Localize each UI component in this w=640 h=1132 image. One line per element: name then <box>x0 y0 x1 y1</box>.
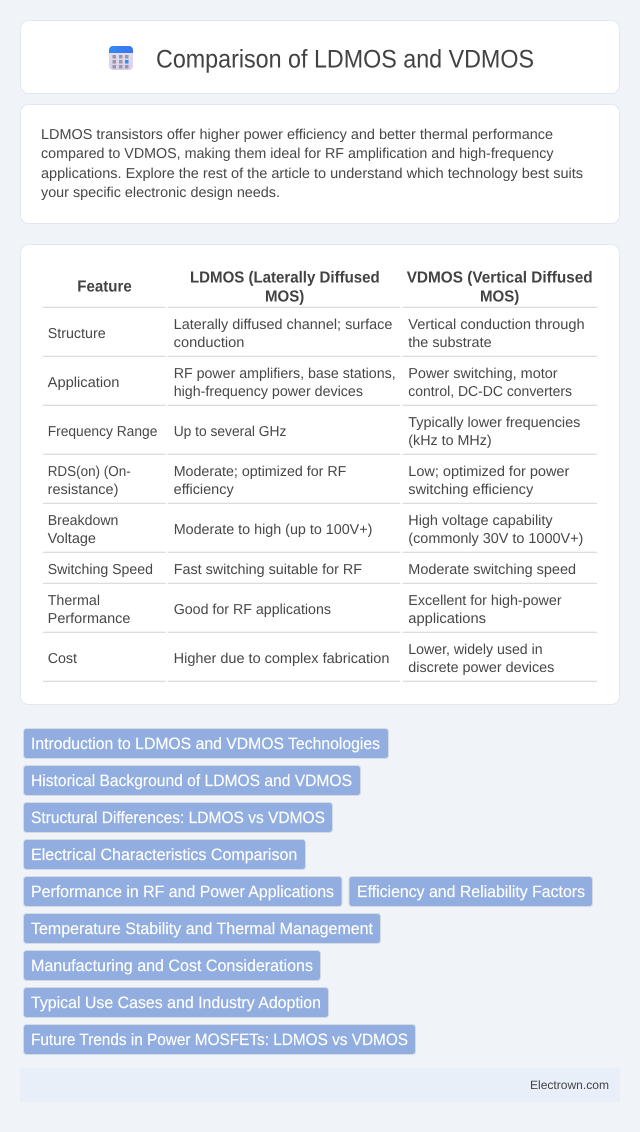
row: breakdown voltage: High voltage capability <box>408 513 553 529</box>
table header: MOS) <box>265 289 304 306</box>
row: breakdown voltage: Breakdown <box>48 513 118 529</box>
tag: typical use cases <box>24 988 328 1018</box>
row: thermal performance: Performance <box>48 611 130 627</box>
panel: header <box>20 20 620 94</box>
tag: performance <box>24 876 342 906</box>
row: application: control, DC-DC converters <box>408 384 572 400</box>
intro text: LDMOS transistors offer higher power efficiency and better thermal performance <box>41 127 553 143</box>
table header: LDMOS (Laterally Diffused <box>190 270 380 287</box>
row: switching speed: Switching Speed <box>48 562 153 578</box>
panel: introduction <box>20 104 620 224</box>
row: thermal performance <box>48 593 562 627</box>
table header: VDMOS (Vertical Diffused <box>407 270 593 287</box>
row: frequency range <box>48 415 580 449</box>
row: frequency range: Typically lower frequencies <box>408 415 580 431</box>
row: on-resistance: Low; optimized for power <box>408 464 569 480</box>
tag: historical background <box>24 766 360 796</box>
tag list: article sections <box>24 728 592 1054</box>
row: thermal performance: Good for RF applications <box>174 602 331 618</box>
intro text: compared to VDMOS, making them ideal for RF amplification and high-frequency <box>41 146 554 162</box>
row: on-resistance: Moderate; optimized for RF <box>174 464 347 480</box>
row: breakdown voltage <box>48 513 583 547</box>
row: cost: discrete power devices <box>408 660 554 676</box>
row: frequency range: (kHz to MHz) <box>408 433 492 449</box>
row: structure <box>48 317 585 351</box>
row: on-resistance: resistance) <box>48 482 118 498</box>
icon: calendar <box>109 46 133 70</box>
row: cost: Cost <box>48 651 77 667</box>
row: on-resistance: RDS(on) (On- <box>48 464 131 480</box>
tag: structural differences <box>24 802 332 832</box>
intro text: applications. Explore the rest of the article to understand which technology best suits <box>41 166 583 182</box>
row: structure: Vertical conduction through <box>408 317 585 333</box>
row: application: high-frequency power devices <box>174 384 363 400</box>
row: thermal performance: applications <box>408 611 486 627</box>
tag: electrical characteristics <box>24 840 306 870</box>
table header <box>77 270 593 306</box>
row: cost: Lower, widely used in <box>408 642 543 658</box>
tag: future trends: Future Trends in Power MOSFETs: LDMOS vs VDMOS <box>31 1031 408 1049</box>
row: structure: Laterally diffused channel; surface <box>174 317 392 333</box>
table header: Feature <box>77 278 132 296</box>
row: application <box>48 366 572 400</box>
tag: introduction: Introduction to LDMOS and VDMOS Technologies <box>31 735 380 753</box>
row: structure: conduction <box>174 335 244 351</box>
row: switching speed: Moderate switching speed <box>408 562 576 578</box>
row: frequency range: Frequency Range <box>48 424 157 440</box>
tag: future trends <box>24 1024 416 1054</box>
row: switching speed <box>48 562 576 578</box>
row: application: Power switching, motor <box>408 366 558 382</box>
tag: temperature stability <box>24 914 380 944</box>
row: application: Application <box>48 375 119 391</box>
tag: structural differences: Structural Differences: LDMOS vs VDMOS <box>31 809 325 827</box>
tag: electrical characteristics: Electrical Characteristics Comparison <box>31 846 297 864</box>
tag: efficiency and reliability <box>349 876 592 906</box>
footer: Electrown.com <box>530 1078 609 1092</box>
row: on-resistance <box>48 464 569 498</box>
row: application: RF power amplifiers, base stations, <box>174 366 396 382</box>
tag: manufacturing and cost <box>24 950 320 980</box>
table header: MOS) <box>480 289 519 306</box>
panel: comparison table <box>20 244 620 704</box>
tag: temperature stability: Temperature Stability and Thermal Management <box>31 920 373 938</box>
row: cost: Higher due to complex fabrication <box>174 651 389 667</box>
row: structure: the substrate <box>408 335 492 351</box>
tag: manufacturing and cost: Manufacturing and Cost Considerations <box>31 957 313 975</box>
intro text: your specific electronic design needs. <box>41 185 280 201</box>
row: on-resistance: efficiency <box>174 482 235 498</box>
row: thermal performance: Thermal <box>48 593 100 609</box>
row: thermal performance: Excellent for high-power <box>408 593 562 609</box>
intro text <box>41 127 583 201</box>
tag: historical background: Historical Background of LDMOS and VDMOS <box>31 772 352 790</box>
tag: performance: Performance in RF and Power Applications <box>31 883 334 901</box>
row: switching speed: Fast switching suitable for RF <box>174 562 362 578</box>
tag: efficiency and reliability: Efficiency and Reliability Factors <box>357 883 585 901</box>
tag: typical use cases: Typical Use Cases and Industry Adoption <box>31 994 321 1012</box>
tag: introduction <box>24 728 388 758</box>
row: on-resistance: switching efficiency <box>408 482 534 498</box>
row: frequency range: Up to several GHz <box>174 424 286 440</box>
row: breakdown voltage: (commonly 30V to 1000V+) <box>408 531 583 547</box>
footer <box>20 1068 620 1102</box>
row: breakdown voltage: Voltage <box>48 531 96 547</box>
row: breakdown voltage: Moderate to high (up to 100V+) <box>174 522 372 538</box>
row: structure: Structure <box>48 326 106 342</box>
title: Comparison of LDMOS and VDMOS <box>156 46 534 74</box>
row: cost <box>48 642 554 676</box>
